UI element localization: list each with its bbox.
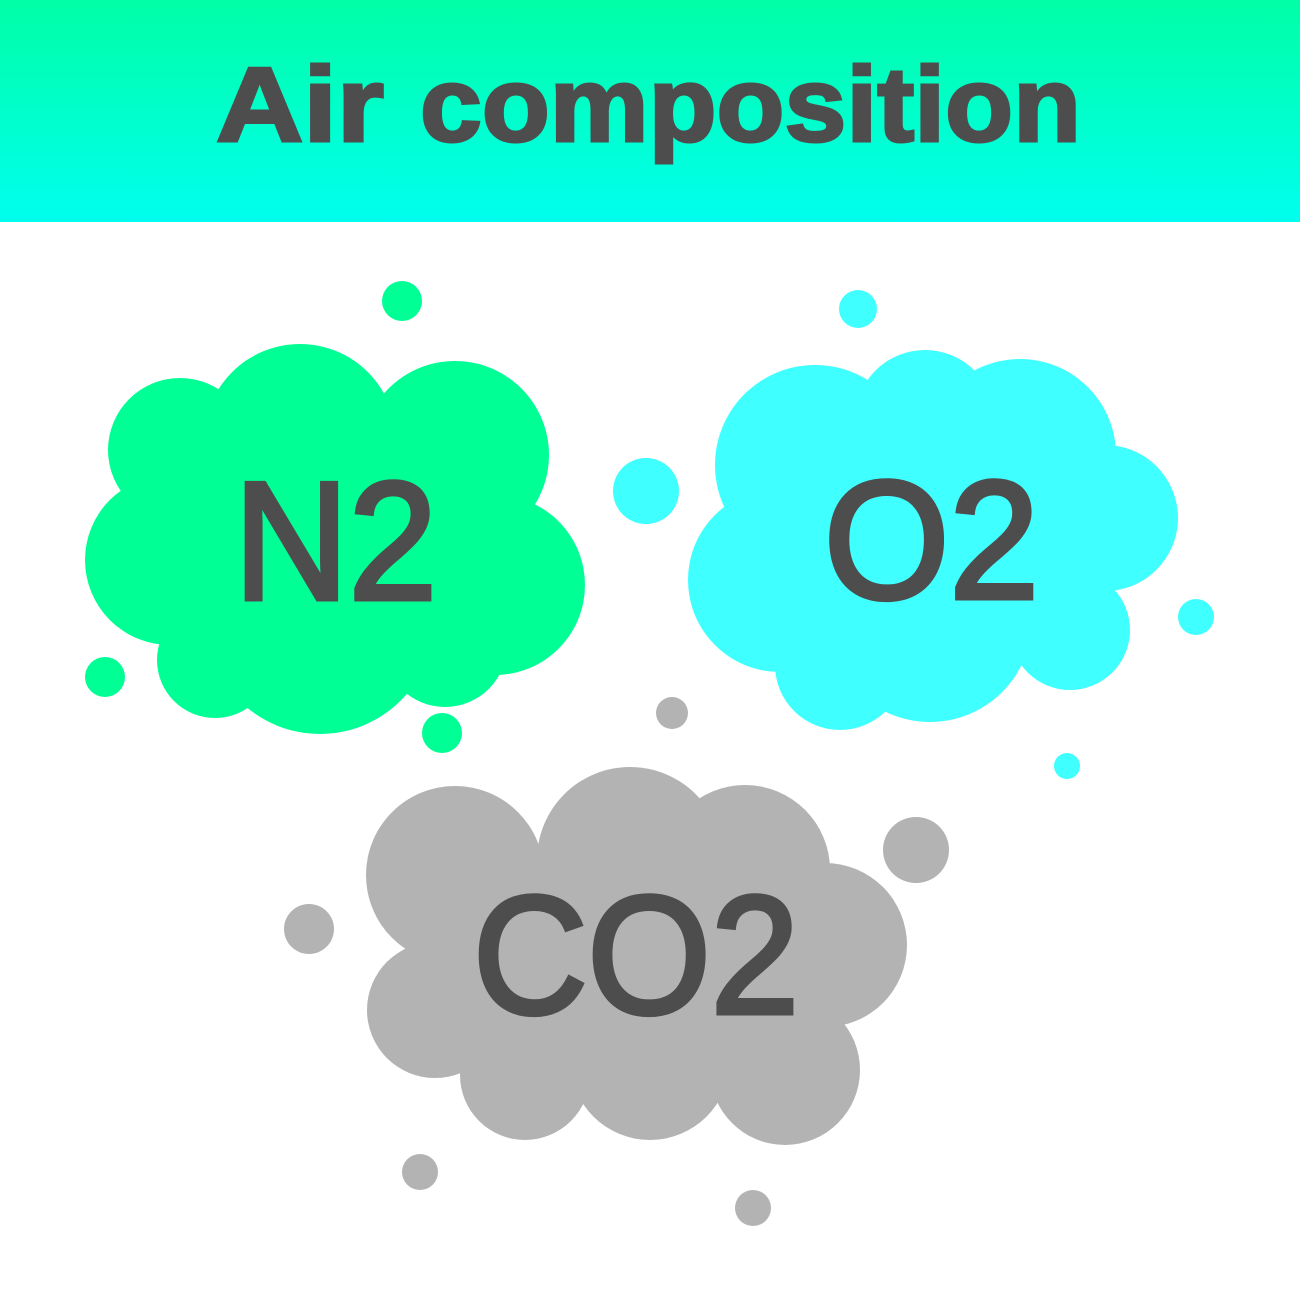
bubbles: green xyxy=(85,281,462,753)
cloud: oxygen xyxy=(688,350,1178,730)
label: CO2: CO2 xyxy=(473,861,799,1049)
label: N2: N2 xyxy=(234,447,437,635)
title: composition xyxy=(420,46,1081,164)
label: O2: O2 xyxy=(824,446,1039,634)
cloud: nitrogen xyxy=(85,344,585,734)
title: Air xyxy=(216,46,384,164)
bubbles: grey xyxy=(284,697,949,1226)
bubbles: cyan xyxy=(613,290,1214,779)
cloud: carbon dioxide xyxy=(366,767,907,1145)
header banner xyxy=(0,0,1300,222)
